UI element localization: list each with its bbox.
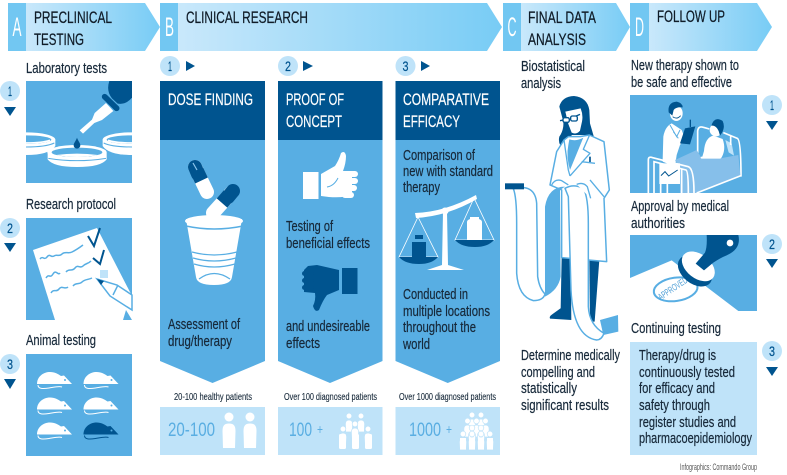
heading: comparative efficacy: EFFICACY (403, 112, 460, 131)
text: new therapy (631, 58, 739, 91)
text: determine results: statistically (521, 381, 578, 397)
badge A2: 2 (7, 220, 13, 236)
text: approval: authorities (631, 216, 685, 232)
panel: continuing testing: Therapy/drug is (639, 348, 716, 364)
badge B3 (396, 56, 430, 76)
badge A1: 1 (8, 83, 12, 99)
badge D2 (762, 234, 782, 268)
text: determine results: compelling and (521, 365, 595, 381)
icon: six mice (26, 354, 132, 456)
panel: continuing testing: pharmacoepidemiology (639, 431, 753, 447)
patients bar 2: + (317, 421, 323, 437)
patients bar 2: 100 (289, 419, 312, 441)
panel: continuing testing: continuously tested (639, 365, 735, 381)
text: multiple locations: Conducted in (403, 287, 468, 303)
header A: preclinical testing (8, 3, 160, 51)
text: assessment: Assessment of (168, 317, 241, 333)
text: multiple locations: world (402, 337, 430, 353)
badge A3: 3 (7, 356, 13, 372)
header B: clinical research: CLINICAL RESEARCH (186, 8, 308, 27)
text: multiple locations: multiple locations (403, 304, 490, 320)
icon: doctor and patient in bed (630, 95, 757, 193)
header C: final data analysis: FINAL DATA (528, 8, 596, 27)
illustration: scientist with printout (505, 96, 618, 340)
heading: comparative efficacy (403, 90, 489, 131)
text: beneficial effects: Testing of (286, 219, 334, 235)
heading: comparative efficacy: COMPARATIVE (403, 90, 489, 109)
icon: thumb up (303, 152, 358, 199)
icon: capsules and cup (185, 163, 243, 285)
text: comparison: Comparison of (403, 148, 476, 164)
patients bar 1: 20-100 (168, 419, 215, 441)
panel: continuing testing: safety through (639, 398, 710, 414)
text: biostatistical analysis: analysis (521, 76, 561, 92)
text: beneficial effects (286, 219, 370, 252)
text: determine results (521, 348, 621, 414)
panel: continuing testing: register studies and (639, 415, 736, 431)
badge B2: 2 (285, 58, 291, 74)
badge A3 (0, 354, 20, 389)
panel: dose finding (160, 81, 265, 383)
label: laboratory tests: Laboratory tests (26, 61, 107, 77)
text: comparison: therapy (403, 180, 441, 196)
badge B1 (160, 56, 195, 76)
label: animal testing: Animal testing (26, 333, 96, 349)
heading: proof of concept (286, 90, 344, 131)
patients bar 1 (160, 407, 265, 455)
badge B3: 3 (402, 58, 409, 74)
badge A2 (0, 218, 20, 252)
text: undesireable effects: and undesireable (286, 319, 370, 335)
header C: final data analysis: ANALYSIS (528, 30, 586, 49)
text: biostatistical analysis: Biostatistical (521, 59, 585, 75)
header C: final data analysis: C (508, 12, 516, 42)
icon: approval stamp: APPROVED (656, 275, 690, 302)
text: comparison: new with standard (403, 164, 493, 180)
panel: comparative efficacy (396, 81, 500, 383)
icon: thumb down (302, 265, 358, 311)
text: determine results: significant results (521, 398, 609, 414)
panel: proof of concept (278, 81, 382, 383)
badge B1: 1 (168, 58, 172, 74)
text: approval: Approval by medical (631, 199, 729, 215)
header B: clinical research (160, 3, 502, 51)
text: assessment (168, 317, 241, 350)
icon: research protocol document and pen (26, 218, 132, 320)
text: continuing testing: Continuing testing (631, 321, 721, 337)
heading: proof of concept: PROOF OF (286, 90, 344, 109)
text: determine results: Determine medically (521, 348, 621, 364)
patients label 2: Over 100 diagnosed patients (284, 391, 377, 403)
text: new therapy: New therapy shown to (631, 58, 739, 74)
patients bar 3: 1000 (409, 419, 441, 441)
text: approval (631, 199, 729, 232)
header A: preclinical testing: PRECLINICAL (34, 8, 112, 27)
badge D1: 1 (770, 97, 774, 113)
icon: pipette and petri dishes (26, 81, 132, 183)
text: biostatistical analysis (521, 59, 585, 92)
patients label 1: 20-100 healthy patients (174, 391, 252, 403)
text: beneficial effects: beneficial effects (286, 236, 370, 252)
heading: proof of concept: CONCEPT (286, 112, 342, 131)
heading: dose finding: DOSE FINDING (168, 90, 253, 109)
panel: continuing testing: for efficacy and (639, 381, 715, 397)
text: assessment: drug/therapy (168, 334, 233, 350)
label: research protocol: Research protocol (26, 197, 116, 213)
badge A1 (0, 81, 20, 116)
header A: preclinical testing: A (12, 12, 22, 42)
patients bar 3: + (446, 421, 452, 437)
header C: final data analysis (503, 3, 630, 51)
text: multiple locations (402, 287, 490, 353)
header A: preclinical testing: TESTING (34, 30, 84, 49)
badge D3: 3 (769, 343, 775, 359)
patients bar 3 (396, 407, 500, 455)
text: new therapy: be safe and effective (631, 75, 732, 91)
text: undesireable effects: effects (286, 336, 320, 352)
header D: follow up (630, 3, 772, 51)
header B: clinical research: B (165, 12, 174, 42)
badge D3 (762, 341, 782, 376)
text: undesireable effects (286, 319, 370, 352)
panel: continuing testing (630, 342, 757, 455)
badge D1 (762, 95, 782, 130)
text: multiple locations: throughout the (403, 320, 476, 336)
patients bar 2 (278, 407, 382, 455)
badge B2 (278, 56, 313, 76)
text: comparison (403, 148, 493, 196)
header D: follow up: D (635, 12, 644, 42)
icon: balance scale (399, 195, 494, 270)
icon: approval stamp (630, 235, 757, 311)
header D: follow up: FOLLOW UP (657, 7, 725, 26)
badge D2: 2 (769, 236, 775, 252)
patients label 3: Over 1000 diagnosed patients (399, 391, 496, 403)
